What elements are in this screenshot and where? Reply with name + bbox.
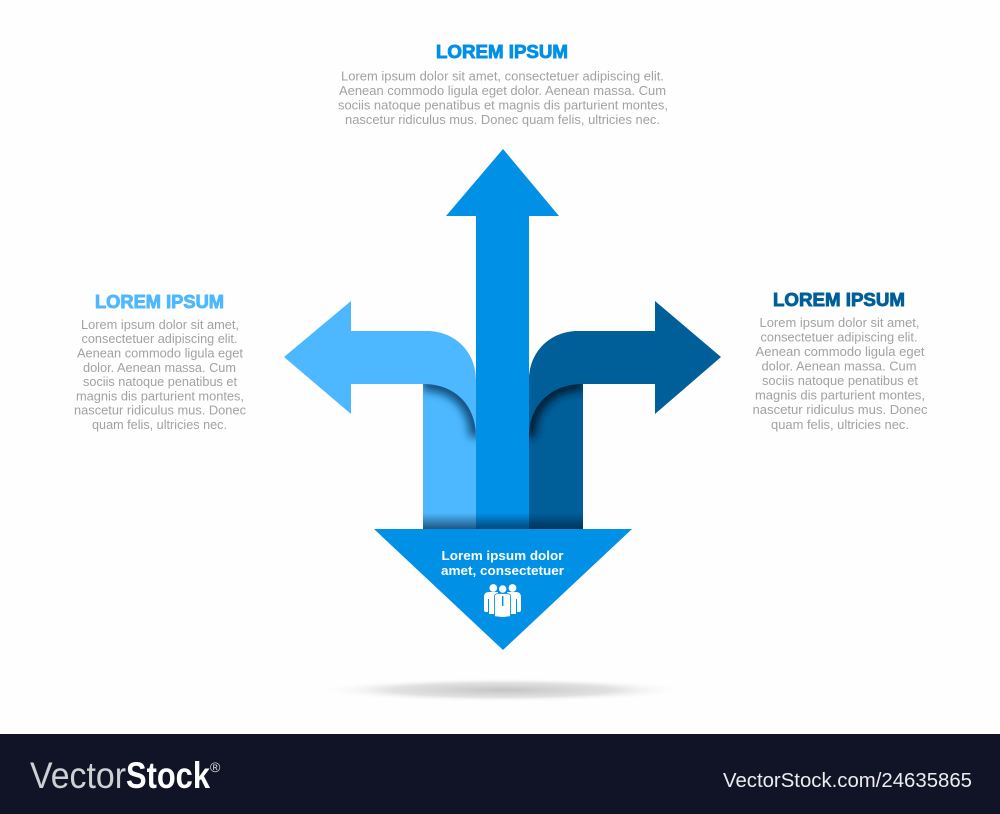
right arrow (529, 301, 721, 530)
right body text: magnis dis parturient montes, (755, 388, 925, 402)
left body text: Lorem ipsum dolor sit amet, (81, 318, 239, 332)
right body text: nascetur ridiculus mus. Donec (752, 403, 928, 417)
right body text: consectetuer adipiscing elit. (760, 330, 918, 344)
top heading: LOREM IPSUM (436, 41, 568, 62)
footer band (0, 734, 1000, 814)
footer logo: ® (210, 759, 221, 775)
triangle caption (441, 548, 564, 578)
right body text: quam felis, ultricies nec. (771, 418, 909, 432)
left arrow (284, 301, 476, 530)
bottom triangle (374, 529, 632, 650)
left body text: nascetur ridiculus mus. Donec (74, 404, 246, 418)
triangle caption: Lorem ipsum dolor (442, 548, 564, 563)
left body text: Aenean commodo ligula eget (77, 346, 243, 360)
right heading: LOREM IPSUM (773, 289, 905, 310)
right body text: sociis natoque penatibus et (762, 374, 919, 388)
icon: group of people (484, 584, 521, 618)
left body text: dolor. Aenean massa. Cum (83, 361, 236, 375)
top text block (338, 41, 668, 127)
left text block (74, 291, 246, 432)
ground shadow (318, 678, 688, 702)
right body text: dolor. Aenean massa. Cum (762, 360, 916, 374)
top body text (338, 70, 668, 127)
footer id: VectorStock.com/24635865 (723, 770, 972, 792)
left body text (74, 318, 246, 432)
right text block (752, 289, 928, 432)
left heading: LOREM IPSUM (95, 291, 224, 312)
top body text: Lorem ipsum dolor sit amet, consectetuer adipiscing elit. (341, 70, 664, 84)
left body text: sociis natoque penatibus et (83, 375, 237, 389)
left body text: quam felis, ultricies nec. (92, 418, 227, 432)
top body text: Aenean commodo ligula eget dolor. Aenean massa. Cum (339, 84, 666, 98)
center arrow (446, 149, 559, 529)
right body text: Lorem ipsum dolor sit amet, (760, 316, 920, 330)
footer logo: Stock (126, 755, 210, 796)
footer logo (30, 755, 221, 796)
triangle caption: amet, consectetuer (441, 563, 564, 578)
left body text: magnis dis parturient montes, (76, 390, 244, 404)
top body text: sociis natoque penatibus et magnis dis parturient montes, (338, 98, 668, 112)
right body text (752, 316, 928, 432)
top body text: nascetur ridiculus mus. Donec quam felis, ultricies nec. (345, 113, 660, 127)
right body text: Aenean commodo ligula eget (756, 345, 925, 359)
left body text: consectetuer adipiscing elit. (82, 332, 238, 346)
footer logo: Vector (30, 755, 126, 796)
